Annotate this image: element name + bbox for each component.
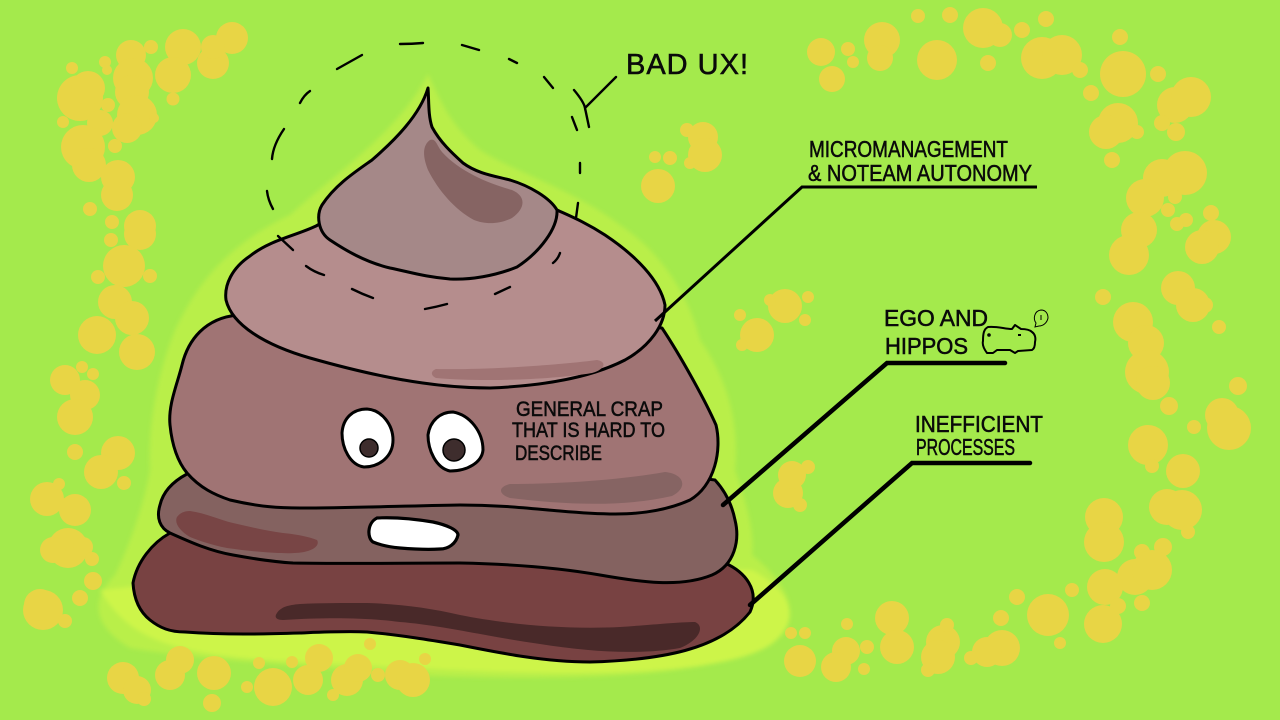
upper layer (226, 180, 665, 388)
label: general crap: GENERAL CRAP (516, 398, 663, 421)
callout: micromanagement: MICROMANAGEMENT (809, 136, 1008, 162)
callout: inefficient processes: PROCESSES (916, 434, 1015, 460)
callout: ego and hippos: EGO AND (884, 305, 988, 331)
poop pile (133, 88, 753, 662)
left eye (342, 409, 393, 467)
label: general crap (512, 398, 665, 465)
bottom layer (133, 530, 753, 662)
icon: speech bubble (1034, 310, 1048, 327)
callout: bad UX (574, 49, 748, 127)
callout: micromanagement (655, 136, 1037, 321)
callout: inefficient processes (750, 411, 1043, 605)
callout: inefficient processes: INEFFICIENT (915, 411, 1043, 437)
label: general crap: DESCRIBE (515, 442, 602, 465)
second layer (170, 300, 718, 514)
callout: ego and hippos: HIPPOS (885, 333, 968, 359)
dashed outline: bad UX (267, 43, 580, 309)
label: general crap: THAT IS HARD TO (512, 419, 665, 442)
third layer (158, 440, 737, 583)
mouth (369, 518, 458, 549)
eyes (342, 409, 483, 471)
lime glow behind the pile (99, 74, 790, 678)
icon: hippo (983, 325, 1035, 353)
callout: bad UX: BAD UX! (626, 49, 748, 81)
right eye (428, 412, 483, 471)
callout: ego and hippos (723, 305, 1048, 505)
callout: micromanagement: & NOTEAM AUTONOMY (808, 160, 1032, 186)
tip layer (319, 88, 557, 279)
